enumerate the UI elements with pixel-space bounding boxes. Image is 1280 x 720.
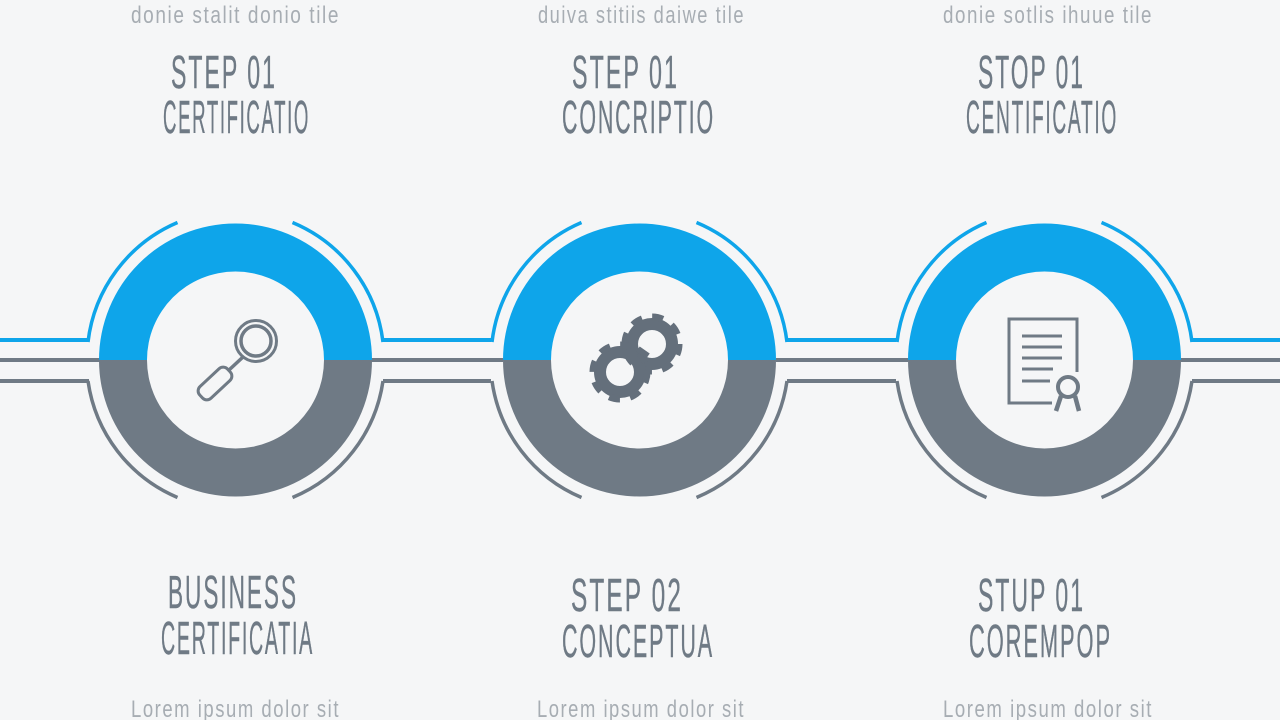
ring: grey bottom half <box>99 360 372 496</box>
outer arcs: blue <box>492 222 787 342</box>
step 3 ring <box>897 222 1192 498</box>
step 2 ring <box>492 222 787 498</box>
top heading: column 1 <box>163 46 310 143</box>
text: CONCEPTUA <box>562 615 714 667</box>
icon: gears <box>593 317 679 399</box>
top caption: column 2: duiva stitiis daiwe tile <box>538 2 745 29</box>
ring: grey bottom half <box>908 360 1181 496</box>
timeline connector: blue upper line <box>0 338 1280 342</box>
outer arcs: grey <box>897 381 1192 498</box>
text: COREMPOP <box>969 615 1112 667</box>
step 1 ring <box>88 222 383 498</box>
bottom heading: column 2: STEP 02 <box>571 569 683 621</box>
timeline connector: grey lower line <box>0 379 1280 383</box>
timeline connector: grey centre line <box>0 358 1280 362</box>
outer arcs: grey <box>492 381 787 498</box>
ring: blue top half <box>908 224 1181 360</box>
bottom heading: column 3: STUP 01 <box>978 569 1085 621</box>
top heading: column 2: STEP 01 <box>572 46 679 98</box>
top caption: column 1: donie stalit donio tile <box>131 2 340 29</box>
icon: magnifying glass <box>196 320 276 402</box>
top heading: column 2 <box>562 46 715 143</box>
ring: blue top half <box>99 224 372 360</box>
bottom heading: column 2 <box>562 569 714 667</box>
bottom heading: column 1 <box>161 566 314 664</box>
top heading: column 3 <box>966 46 1118 143</box>
top heading: column 1: STEP 01 <box>171 46 277 98</box>
text: CERTIFICATIA <box>161 612 314 664</box>
bottom heading: column 1: BUSINESS <box>168 566 298 618</box>
ring: grey bottom half <box>503 360 776 496</box>
bottom heading: column 3 <box>969 569 1112 667</box>
outer arcs: grey <box>88 381 383 498</box>
text: CONCRIPTIO <box>562 91 715 143</box>
outer arcs: blue <box>88 222 383 342</box>
top caption: column 3: donie sotlis ihuue tile <box>943 2 1153 29</box>
icon: certificate with ribbon <box>1009 319 1079 411</box>
ring: blue top half <box>503 224 776 360</box>
outer arcs: blue <box>897 222 1192 342</box>
top heading: column 3: STOP 01 <box>978 46 1085 98</box>
text: CERTIFICATIO <box>163 91 310 143</box>
